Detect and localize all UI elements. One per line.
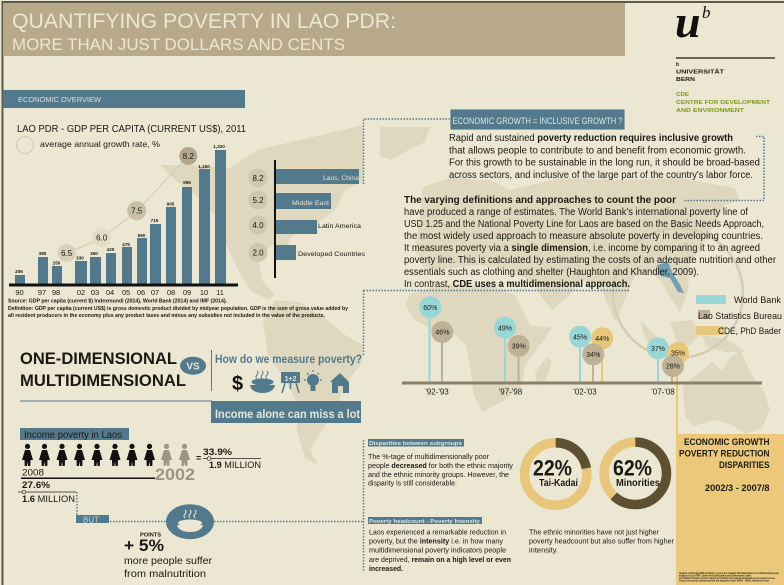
- text block: inclusive growth: across sectors, and inclusive of the large part of the country's labor force.: [449, 170, 753, 181]
- chart source note: all resident producers in the economy plus any product taxes and minus any subsidies not included in the value of the products.: [8, 313, 326, 319]
- university logo: b: [676, 62, 679, 68]
- bar chart: GDP per capita: 1,320: [213, 144, 225, 149]
- bar chart: GDP per capita: 1,160: [198, 164, 210, 169]
- donut chart: Minorities 62%: 62%: [613, 456, 652, 480]
- text block: inclusive growth: Rapid and sustained poverty reduction requires inclusive growth: [449, 133, 733, 144]
- text block: inclusive growth: that allows people to contribute to and benefit from economic growth.: [449, 146, 746, 156]
- stat: 2008 poverty: 27.6%: [22, 480, 51, 491]
- text block: disparities: people decreased for both the ethnic majority: [368, 463, 514, 470]
- text block: definitions of poverty: have produced a range of estimates. The World Bank's international poverty line of: [404, 207, 748, 218]
- stat: plus 5 points malnutrition: from malnutrition: [124, 569, 206, 580]
- bar chart: GDP per capita: 250: [53, 260, 61, 266]
- chart legend: growth rate: average annual growth rate, %: [40, 139, 160, 149]
- section header: inclusive growth: ECONOMIC GROWTH = INCLUSIVE GROWTH ?: [452, 116, 622, 127]
- bar chart: GDP per capita: 955: [183, 180, 191, 185]
- bar chart: GDP per capita: 206: [15, 269, 23, 274]
- bar chart: regional comparison: 8.2: [252, 174, 264, 183]
- bar chart: GDP per capita: 420: [107, 247, 115, 252]
- panel: summary: ECONOMIC GROWTH: [684, 437, 770, 447]
- text block: disparities: disparity is still considerable.: [368, 480, 457, 488]
- heading: how do we measure poverty: How do we measure poverty?: [215, 352, 362, 366]
- bar chart: GDP per capita: 90: [15, 288, 24, 297]
- bar chart: regional comparison: Laos, China: [323, 175, 359, 182]
- timeline chart: poverty estimates: '02-'03: [573, 388, 597, 396]
- timeline chart: poverty estimates: '97-'98: [499, 388, 523, 396]
- section header: economic overview: [3, 90, 245, 108]
- text block: inclusive growth: [449, 133, 760, 181]
- panel: summary: POVERTY REDUCTION: [679, 448, 770, 458]
- text block: disparities: and the ethnic minority groups. However, the: [368, 472, 509, 479]
- bar chart: GDP per capita: 8.2: [183, 152, 194, 161]
- label: disparities between subgroups: Disparities between subgroups: [369, 441, 462, 447]
- icon: house: [330, 373, 349, 393]
- bar chart: GDP per capita: 715: [151, 218, 159, 223]
- timeline chart: poverty estimates: 60%: [423, 305, 437, 312]
- bar chart: GDP per capita: 06: [137, 288, 145, 297]
- dotted connectors: [77, 119, 764, 572]
- section header: economic overview: ECONOMIC OVERVIEW: [18, 95, 102, 104]
- bar chart: GDP per capita: 475: [122, 242, 130, 247]
- chart source note: Source: GDP per capita (current $) Indexmundi (2014), World Bank (2014) and IMF (2014).: [8, 298, 228, 304]
- bar chart: regional comparison: 5.2: [252, 196, 264, 205]
- university logo: UNIVERSITÄT: [676, 68, 725, 76]
- timeline chart: poverty estimates: 37%: [651, 346, 665, 353]
- university logo: AND ENVIRONMENT: [676, 108, 745, 114]
- bar chart: GDP per capita: 07: [151, 288, 159, 297]
- world map background: [160, 125, 770, 465]
- university logo: CENTRE FOR DEVELOPMENT: [676, 100, 771, 106]
- donut chart: Tai-Kadai 22%: 22%: [533, 456, 572, 480]
- stat: 2008 poverty: [18, 468, 155, 505]
- timeline chart: poverty estimates: [402, 296, 762, 434]
- chart source note: [8, 298, 348, 319]
- icon: malnutrition bowl: [166, 504, 214, 539]
- university logo: [675, 0, 775, 114]
- bar chart: regional comparison: [248, 160, 366, 278]
- university logo: BERN: [676, 77, 695, 83]
- text block: definitions of poverty: the most widely used approach to measure absolute poverty in developing countries.: [404, 231, 763, 242]
- bar chart: regional comparison: Developed Countries: [298, 251, 366, 258]
- pictogram: people in poverty: [22, 444, 190, 466]
- chart legend: growth rate: [16, 136, 160, 154]
- text block: definitions of poverty: In contrast, CDE uses a multidimensional approach.: [404, 279, 630, 290]
- stat: plus 5 points malnutrition: more people suffer: [124, 556, 213, 567]
- donut chart: Minorities 62%: Minorities: [616, 478, 660, 489]
- text block: poverty intensity: multidimensional poverty indicators people: [369, 548, 506, 554]
- heading: one-dimensional vs multidimensional: [20, 349, 206, 390]
- bar chart: GDP per capita: 09: [183, 288, 191, 297]
- section header: inclusive growth: [450, 109, 625, 130]
- donut chart: Tai-Kadai 22%: Tai-Kadai: [539, 478, 578, 489]
- panel: summary: 2002/3 - 2007/8: [705, 483, 770, 493]
- text block: definitions of poverty: The varying definitions and approaches to count the poor: [404, 195, 676, 206]
- text block: ethnic minorities: poverty headcount but also suffer from higher: [529, 538, 675, 546]
- bar chart: regional comparison: Middle East: [292, 200, 329, 207]
- university logo: CDE: [676, 92, 689, 98]
- label: poverty headcount and intensity: Poverty headcount - Poverty Intensity: [369, 519, 481, 525]
- text block: definitions of poverty: poverty line. This is calculated by estimating the costs of an adequate nutrition and other: [404, 255, 777, 266]
- text block: ethnic minorities: intensity.: [529, 548, 558, 554]
- heading: one-dimensional vs multidimensional: ONE-DIMENSIONAL: [20, 349, 177, 368]
- bar chart: GDP per capita: 380: [39, 251, 47, 256]
- text block: ethnic minorities: The ethnic minorities have not just higher: [529, 530, 660, 536]
- university logo: b: [702, 3, 710, 22]
- timeline chart: poverty estimates: 34%: [586, 352, 600, 359]
- text block: poverty intensity: [369, 530, 511, 573]
- title banner: [3, 3, 625, 56]
- text block: inclusive growth: For this growth to be sustainable in the long run, it should be broad-based: [449, 158, 760, 168]
- donut chart: Tai-Kadai 22%: [524, 443, 587, 505]
- icon: school board: 1+2: [285, 376, 297, 383]
- bar chart: GDP per capita: 330: [76, 256, 84, 260]
- bar chart: GDP per capita: 6.0: [96, 234, 108, 242]
- panel: summary: DISPARITIES: [719, 460, 770, 470]
- bar chart: GDP per capita: 7.5: [131, 206, 143, 216]
- label: but: [76, 515, 109, 524]
- legend: poverty data sources: Lao Statistics Bureau: [698, 311, 782, 321]
- legend: poverty data sources: CDE, PhD Bader: [718, 326, 781, 336]
- bar chart: GDP per capita: 04: [106, 288, 114, 297]
- bar chart: GDP per capita: 905: [167, 202, 175, 206]
- timeline chart: poverty estimates: 44%: [595, 336, 609, 343]
- chart source note: Definition: GDP per capita (current US$) is gross domestic product divided by midyear population. GDP is the sum of gross value added by: [8, 306, 348, 312]
- icon: school board: [281, 372, 300, 393]
- text block: definitions of poverty: [404, 195, 777, 290]
- icon: dollar: $: [232, 373, 243, 395]
- title line 1: QUANTIFYING POVERTY IN LAO PDR:: [12, 10, 396, 33]
- stat: 2008 poverty: 2008: [22, 468, 44, 478]
- text block: poverty intensity: poverty, but the intensity i.e. in how many: [369, 538, 504, 546]
- legend: poverty data sources: [696, 295, 782, 336]
- bar chart: GDP per capita: 360: [90, 251, 98, 256]
- timeline chart: poverty estimates: 46%: [435, 330, 449, 336]
- callout: income alone can miss a lot: Income alone can miss a lot: [215, 407, 360, 421]
- timeline chart: poverty estimates: 39%: [512, 344, 526, 350]
- icon: light bulb: [304, 370, 322, 391]
- bar chart: GDP per capita: 03: [91, 288, 99, 297]
- text block: disparities: [368, 454, 514, 488]
- stat: 2002 poverty: 1.9 MILLION: [209, 460, 261, 471]
- text block: ethnic minorities: [529, 530, 675, 554]
- stat: 2002 poverty: [155, 447, 261, 484]
- timeline chart: poverty estimates: 35%: [671, 350, 685, 358]
- bar chart: GDP per capita: 08: [167, 288, 175, 297]
- bar chart: regional comparison: 4.0: [252, 221, 264, 230]
- text block: definitions of poverty: essentials such as clothing and shelter (Haughton and Khandler, 2009).: [404, 267, 699, 278]
- bar chart: GDP per capita: [9, 144, 238, 297]
- text block: disparities: The %-tage of multidimensionally poor: [368, 454, 490, 461]
- legend: poverty data sources: World Bank: [734, 295, 782, 305]
- bar chart: regional comparison: 2.0: [252, 248, 264, 258]
- panel footnote: [679, 571, 779, 582]
- bar chart: GDP per capita: 98: [52, 288, 60, 297]
- chart title: LAO PDR - GDP PER CAPITA (CURRENT US$), 2011: [17, 123, 246, 135]
- text block: poverty intensity: increased.: [369, 566, 403, 573]
- heading: one-dimensional vs multidimensional: VS: [186, 362, 200, 372]
- label: poverty headcount and intensity: [368, 517, 482, 525]
- label: income poverty in Laos: Income poverty in Laos: [24, 430, 122, 441]
- timeline chart: poverty estimates: '07-'08: [651, 388, 675, 396]
- timeline chart: poverty estimates: 45%: [573, 334, 587, 342]
- heading: one-dimensional vs multidimensional: MULTIDIMENSIONAL: [20, 371, 186, 390]
- title line 2: MORE THAN JUST DOLLARS AND CENTS: [12, 35, 345, 54]
- stat: plus 5 points malnutrition: + 5%: [124, 536, 164, 555]
- bar chart: GDP per capita: 590: [138, 233, 146, 238]
- timeline chart: poverty estimates: 49%: [498, 326, 512, 332]
- text block: poverty intensity: Laos experienced a remarkable reduction in: [369, 530, 506, 536]
- bar chart: GDP per capita: 11: [216, 288, 224, 297]
- panel: summary: [676, 434, 784, 585]
- label: disparities between subgroups: [368, 439, 464, 447]
- timeline chart: poverty estimates: 28%: [666, 364, 680, 370]
- stat: 2008 poverty: 1.6 MILLION: [22, 494, 75, 505]
- bar chart: GDP per capita: 6.5: [61, 249, 73, 258]
- text block: poverty intensity: are deprived, remain on a high level or even: [369, 557, 511, 564]
- stat: plus 5 points malnutrition: [124, 532, 213, 580]
- bar chart: GDP per capita: 02: [77, 288, 85, 297]
- text block: definitions of poverty: It measures poverty via a single dimension, i.e. income by comparing it to an agreed: [404, 243, 760, 254]
- stat: 2002 poverty: 33.9%: [203, 447, 233, 458]
- stat: plus 5 points malnutrition: POINTS: [140, 532, 162, 538]
- label: but: BUT: [83, 516, 99, 524]
- bar chart: regional comparison: Latin America: [318, 223, 361, 230]
- bar chart: GDP per capita: 10: [200, 288, 208, 297]
- panel footnote: analysis of Lao PDR, Centre for Development and Environment, Bern: [679, 574, 751, 578]
- bar chart: GDP per capita: 05: [122, 288, 130, 297]
- stat: 2002 poverty: 2002: [155, 465, 195, 484]
- stat: 2002 poverty: =: [196, 453, 201, 463]
- bar chart: GDP per capita: 97: [38, 288, 46, 297]
- timeline chart: poverty estimates: '92-'93: [425, 388, 449, 396]
- callout: income alone can miss a lot: [211, 401, 361, 423]
- icon: food bowl: [250, 371, 275, 393]
- donut chart: Minorities 62%: [604, 442, 666, 504]
